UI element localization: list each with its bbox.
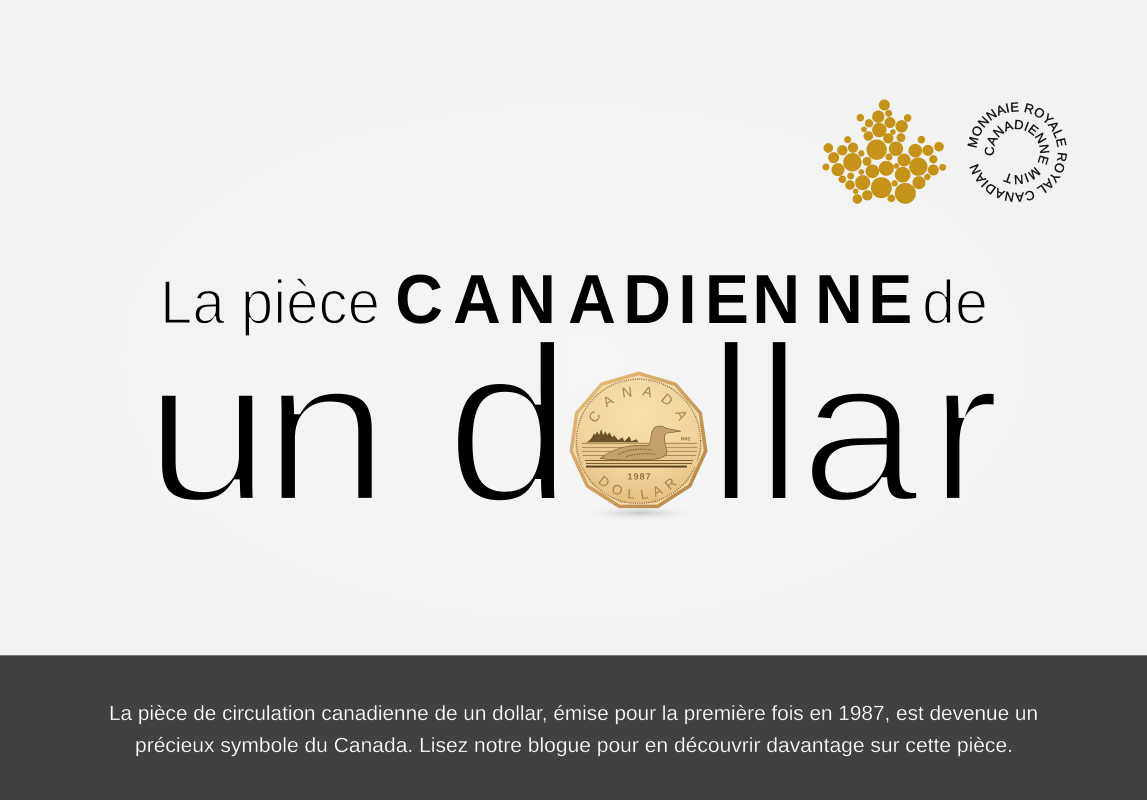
title line: La pièce CANADIENNE de: CANADIENNE bbox=[395, 260, 912, 338]
footer text: précieux symbole du Canada. Lisez notre blogue pour en découvrir davantage sur cette pièce. bbox=[135, 734, 1013, 757]
footer band bbox=[0, 655, 1147, 800]
headline: dollar letters bbox=[445, 299, 1000, 551]
logo: circular wordmark: MONNAIE ROYALE ROYAL CANADIAN bbox=[968, 102, 1067, 202]
coin loon bbox=[600, 426, 681, 460]
headline: dollar letters: d bbox=[445, 299, 573, 551]
coin initials: RRC bbox=[681, 436, 692, 441]
footer text: La pièce de circulation canadienne de un dollar, émise pour la première fois en 1987, est devenue un bbox=[109, 702, 1038, 725]
coin island with trees bbox=[586, 429, 638, 442]
coin date: 1987 bbox=[627, 472, 652, 482]
logo: circular wordmark: CANADIENNE MINT bbox=[984, 120, 1050, 184]
headline: un: un bbox=[144, 317, 390, 546]
coin dotted ring bbox=[576, 379, 701, 503]
coin legend: CANADA: CANADA bbox=[590, 386, 686, 422]
coin shadow bbox=[582, 505, 698, 521]
coin legend: DOLLAR: DOLLAR bbox=[598, 476, 676, 500]
title line: La pièce CANADIENNE de: de bbox=[922, 268, 988, 338]
footer text bbox=[109, 702, 1038, 757]
title line: La pièce CANADIENNE de bbox=[160, 260, 988, 338]
logo: maple leaf of gold circles bbox=[823, 100, 946, 203]
headline: dollar letters: ar bbox=[800, 317, 1000, 546]
headline: dollar letters: ll bbox=[707, 299, 803, 551]
coin face bbox=[574, 376, 703, 504]
coin lake bbox=[582, 442, 697, 467]
title line: La pièce CANADIENNE de: La pièce bbox=[160, 268, 380, 338]
coin rim bbox=[571, 373, 706, 507]
coin: one dollar loonie bbox=[570, 372, 708, 508]
